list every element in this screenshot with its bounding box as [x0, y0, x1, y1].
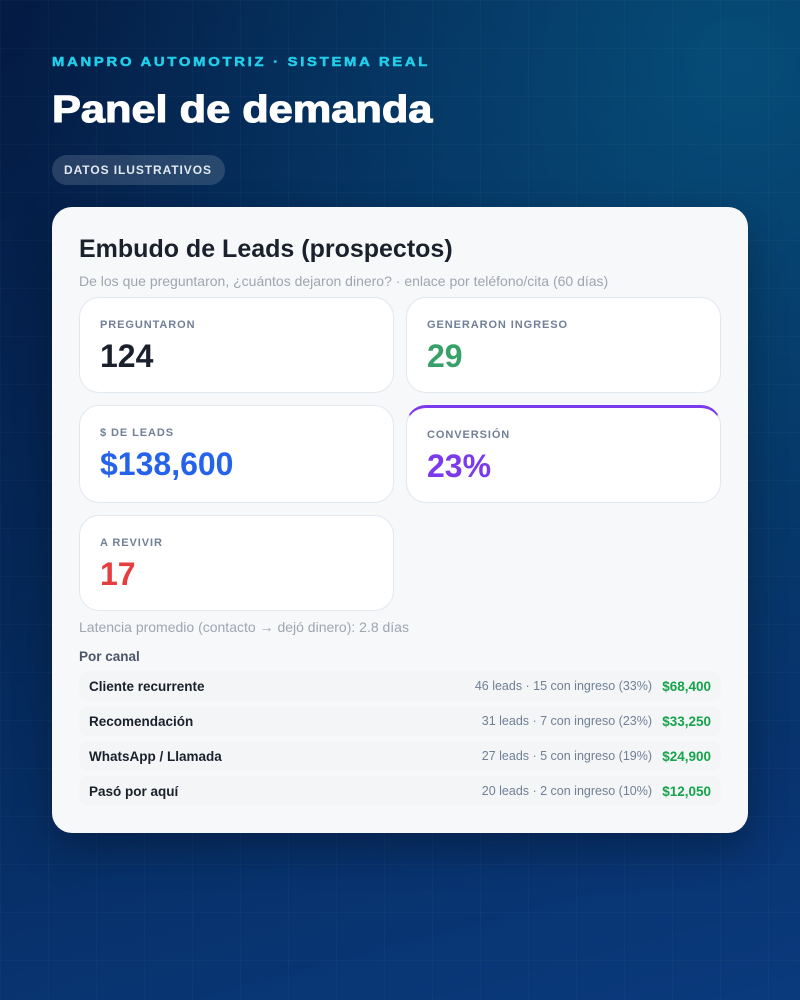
channel row: whatsapp: WhatsApp / Llamada — [89, 749, 222, 764]
title: Panel de demanda — [52, 89, 432, 131]
channel row: recomendacion: Recomendación — [89, 714, 193, 729]
eyebrow: MANPRO AUTOMOTRIZ · SISTEMA REAL — [52, 54, 430, 69]
channel row: whatsapp: $24,900 — [662, 749, 711, 764]
stat: a revivir: A REVIVIR — [100, 536, 163, 548]
latency note: Latencia promedio (contacto → dejó dinero): 2.8 días — [79, 619, 409, 635]
panel heading: Embudo de Leads (prospectos) — [79, 235, 453, 263]
stat: preguntaron: PREGUNTARON — [100, 318, 195, 330]
stat: preguntaron — [79, 297, 394, 393]
channel row: whatsapp — [79, 741, 721, 771]
stat: dinero de leads: $ DE LEADS — [100, 426, 174, 438]
stat: generaron ingreso — [406, 297, 721, 393]
channel heading: Por canal — [79, 649, 140, 664]
stat: conversion — [406, 405, 721, 503]
panel: embudo de leads — [52, 207, 748, 833]
channel row: cliente recurrente — [79, 671, 721, 701]
channel row: cliente recurrente: $68,400 — [662, 679, 711, 694]
badge: datos ilustrativos — [52, 155, 225, 185]
stat: conversion: CONVERSIÓN — [427, 428, 510, 440]
channel row: recomendacion: 31 leads · 7 con ingreso (23%) — [482, 714, 652, 728]
stat: preguntaron: 124 — [100, 338, 153, 374]
stat: conversion: 23% — [427, 448, 491, 484]
channel row: paso por aqui: $12,050 — [662, 784, 711, 799]
channel row: paso por aqui — [79, 776, 721, 806]
stat: a revivir — [79, 515, 394, 611]
badge: datos ilustrativos: DATOS ILUSTRATIVOS — [64, 163, 212, 177]
stat: dinero de leads: $138,600 — [100, 446, 233, 482]
stat: generaron ingreso: GENERARON INGRESO — [427, 318, 568, 330]
channel row: paso por aqui: 20 leads · 2 con ingreso (10%) — [482, 784, 652, 798]
panel subtitle: De los que preguntaron, ¿cuántos dejaron dinero? · enlace por teléfono/cita (60 días) — [79, 273, 608, 289]
channel row: cliente recurrente: Cliente recurrente — [89, 679, 205, 694]
stat: dinero de leads — [79, 405, 394, 503]
channel row: recomendacion — [79, 706, 721, 736]
channel row: recomendacion: $33,250 — [662, 714, 711, 729]
channel row: paso por aqui: Pasó por aquí — [89, 784, 178, 799]
stat: a revivir: 17 — [100, 556, 136, 592]
channel row: cliente recurrente: 46 leads · 15 con ingreso (33%) — [475, 679, 652, 693]
stat: generaron ingreso: 29 — [427, 338, 463, 374]
channel row: whatsapp: 27 leads · 5 con ingreso (19%) — [482, 749, 652, 763]
